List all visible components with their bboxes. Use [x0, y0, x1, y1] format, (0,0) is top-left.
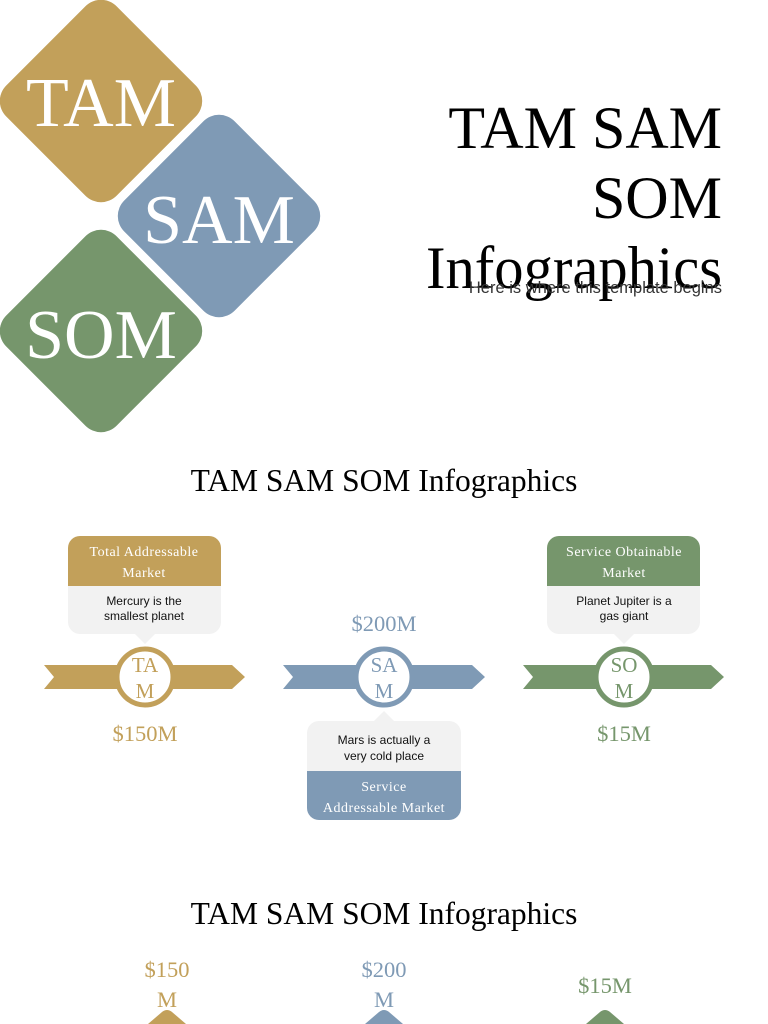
circle: TAM: M — [136, 679, 155, 703]
ribbon: SOM — [523, 665, 724, 689]
circle: SOM: M — [615, 679, 634, 703]
bottom value: TAM: $150 — [144, 957, 190, 982]
value: SOM: $15M — [597, 721, 651, 746]
callout: SOM: Market — [602, 566, 646, 581]
circle: TAM — [117, 649, 173, 705]
callout: TAM — [68, 536, 221, 644]
callout: SOM — [547, 536, 700, 644]
callout: SOM: gas giant — [600, 609, 649, 623]
bottom shape: SAM — [365, 1010, 403, 1024]
circle: SOM: SO — [611, 653, 637, 677]
diamond: SAM — [109, 106, 329, 326]
callout: SOM: Service Obtainable — [566, 545, 682, 560]
bottom value: TAM — [144, 957, 190, 1012]
value: TAM: $150M — [112, 721, 178, 746]
section title 2: TAM SAM SOM Infographics — [191, 463, 577, 498]
callout: TAM: smallest planet — [104, 609, 185, 623]
circle: SAM: SA — [371, 653, 398, 677]
diamond: SOM: SOM — [25, 297, 177, 374]
bottom value: SAM: M — [374, 987, 394, 1012]
diamond: SAM: SAM — [143, 182, 295, 259]
bottom shape: TAM — [148, 1010, 186, 1024]
callout: TAM: Market — [122, 566, 166, 581]
circle: SAM: M — [375, 679, 394, 703]
main title: TAM SAM — [448, 95, 722, 161]
bottom value: SAM — [362, 957, 406, 1012]
section title 3: TAM SAM SOM Infographics — [191, 896, 577, 931]
callout: SAM: Addressable Market — [323, 801, 445, 816]
callout: SAM: very cold place — [344, 749, 424, 763]
bottom shape: SOM — [586, 1010, 624, 1024]
callout: SAM: Mars is actually a — [338, 733, 431, 747]
main title: SOM — [592, 165, 722, 231]
callout: SAM: Service — [361, 780, 407, 795]
bottom value: SOM: $15M — [578, 973, 632, 998]
callout: TAM: Total Addressable — [90, 545, 198, 560]
SAM unit — [283, 611, 485, 820]
callout: SOM: Planet Jupiter is a — [576, 594, 672, 608]
circle: SOM — [596, 649, 652, 705]
diamond: TAM — [0, 0, 211, 211]
diamond: TAM: TAM — [26, 65, 176, 142]
SOM unit — [523, 536, 724, 746]
TAM unit — [44, 536, 245, 746]
diamond: SOM — [0, 221, 211, 441]
main title: Infographics — [426, 235, 722, 301]
subtitle: Here is where this template begins — [469, 279, 722, 297]
ribbon: TAM — [44, 665, 245, 689]
bottom value: SAM: $200 — [362, 957, 406, 982]
value: SAM: $200M — [351, 611, 417, 636]
main title — [426, 95, 722, 301]
circle: TAM: TA — [132, 653, 159, 677]
callout: TAM: Mercury is the — [106, 594, 182, 608]
circle: SAM — [356, 649, 412, 705]
ribbon: SAM — [283, 665, 485, 689]
callout: SAM — [307, 711, 461, 820]
bottom value: TAM: M — [157, 987, 177, 1012]
